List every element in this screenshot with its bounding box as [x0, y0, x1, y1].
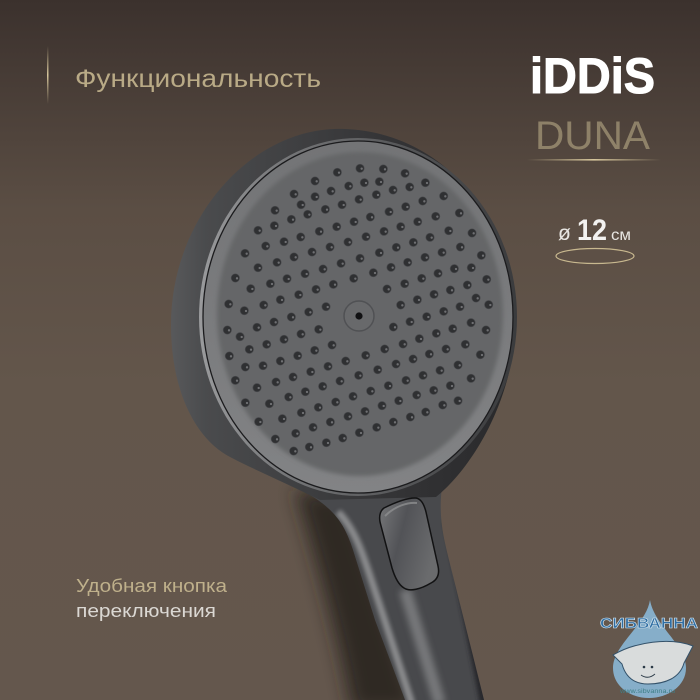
diameter label: см: [611, 227, 631, 244]
caption: [76, 575, 228, 621]
shower head: [171, 129, 517, 500]
nozzles: [227, 168, 490, 451]
spray face: [217, 152, 503, 476]
caption: Удобная кнопка: [76, 575, 228, 596]
head outer body: [171, 129, 516, 500]
diameter label: [558, 214, 631, 247]
brand logo: iDDiS: [530, 48, 655, 104]
shower handle: [312, 492, 484, 700]
handle dark right side: [454, 584, 484, 700]
seller logo: [600, 600, 698, 698]
heading accent line: [47, 46, 48, 104]
handle mid highlight: [405, 590, 440, 700]
chrome band: [199, 138, 517, 496]
center hub: [344, 301, 374, 331]
logo bathtub: [613, 641, 693, 684]
handle left highlight: [338, 512, 412, 700]
logo url: www.sibvanna.ru: [619, 689, 675, 695]
diameter label: 12: [577, 214, 607, 247]
heading: Функциональность: [75, 65, 321, 93]
model underline: [527, 159, 661, 161]
logo water drop: [613, 600, 686, 698]
shadow of shower head on wall: [295, 490, 420, 700]
caption: переключения: [76, 600, 216, 621]
diameter label: ø: [558, 222, 571, 245]
black seam and face margin: [203, 141, 513, 493]
diameter ellipse icon: [556, 248, 634, 264]
button top highlight: [385, 503, 417, 516]
logo text: СИБВАННА: [600, 615, 698, 632]
model name: DUNA: [535, 114, 650, 158]
switch button: [380, 498, 439, 590]
logo bath face: [641, 666, 655, 677]
